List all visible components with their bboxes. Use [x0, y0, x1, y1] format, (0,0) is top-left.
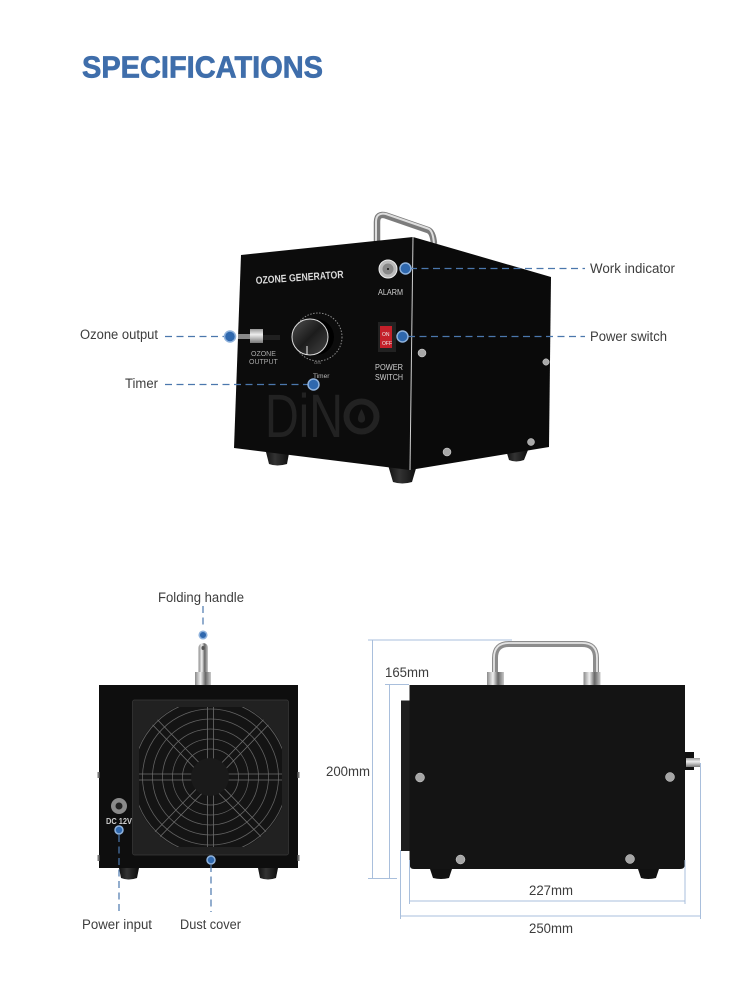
callout: dust cover: Dust cover [180, 917, 241, 932]
callout: folding handle: Folding handle [158, 590, 244, 605]
title: SPECIFICATIONS [82, 50, 323, 84]
dimension: 165mm height [385, 665, 429, 878]
rear plate [401, 700, 410, 851]
brand logo: DiN [265, 382, 343, 450]
callout: power switch: Power switch [590, 329, 667, 344]
fan grille [139, 707, 282, 847]
callout: folding handle [158, 590, 244, 639]
front panel [234, 237, 413, 470]
side view of generator [401, 643, 700, 879]
power switch: SWITCH [375, 372, 403, 382]
callout: power input: Power input [82, 917, 152, 932]
icon: folding handle [195, 643, 211, 685]
dimension: 200mm height [326, 640, 512, 878]
ozone output connector: OUTPUT [249, 359, 278, 366]
dimension: 250mm width: 250mm [529, 921, 573, 936]
callout: dust cover [180, 856, 241, 932]
timer dial [292, 313, 342, 380]
side feet [430, 869, 659, 879]
icon: top handle [376, 214, 434, 244]
fan hub [191, 758, 229, 796]
power switch [375, 322, 403, 382]
rear feet [119, 868, 278, 880]
dimension: 227mm width [410, 860, 685, 904]
DC power port [106, 798, 133, 826]
callout: timer: Timer [125, 376, 158, 391]
callout: ozone output [80, 327, 236, 342]
front view of ozone generator [234, 214, 551, 483]
callout: work indicator: Work indicator [590, 261, 675, 276]
panel heading: OZONE GENERATOR [255, 269, 344, 287]
dimension: 250mm width [400, 763, 700, 936]
timer dial: O\S [314, 360, 321, 365]
rear view of generator [98, 643, 300, 880]
ozone output connector: OZONE [251, 351, 276, 358]
alarm indicator [378, 260, 403, 297]
rear body [99, 685, 298, 868]
callout: power input [82, 826, 152, 932]
ozone output connector [238, 329, 280, 366]
side screws [416, 772, 674, 864]
callout: work indicator [400, 261, 675, 276]
dust cover panel [132, 700, 288, 855]
dimension: 200mm height: 200mm [326, 764, 370, 779]
side body [410, 685, 685, 869]
dimension: 165mm height: 165mm [385, 665, 429, 680]
icon: carry handle [487, 643, 600, 685]
alarm indicator: ALARM [378, 288, 403, 297]
DC power port: DC 12V [106, 817, 133, 826]
side screws [98, 772, 300, 861]
side panel [410, 237, 551, 470]
callout: timer [125, 376, 319, 391]
callout: ozone output: Ozone output [80, 327, 158, 342]
panel screws [418, 349, 549, 456]
feet [265, 448, 528, 484]
output connector [685, 752, 700, 770]
power switch: POWER [375, 362, 403, 372]
callout: power switch [397, 329, 667, 344]
power switch: ON [382, 332, 390, 338]
dimension: 227mm width: 227mm [529, 883, 573, 898]
timer dial: Timer [313, 373, 330, 380]
power switch: OFF [382, 341, 392, 347]
